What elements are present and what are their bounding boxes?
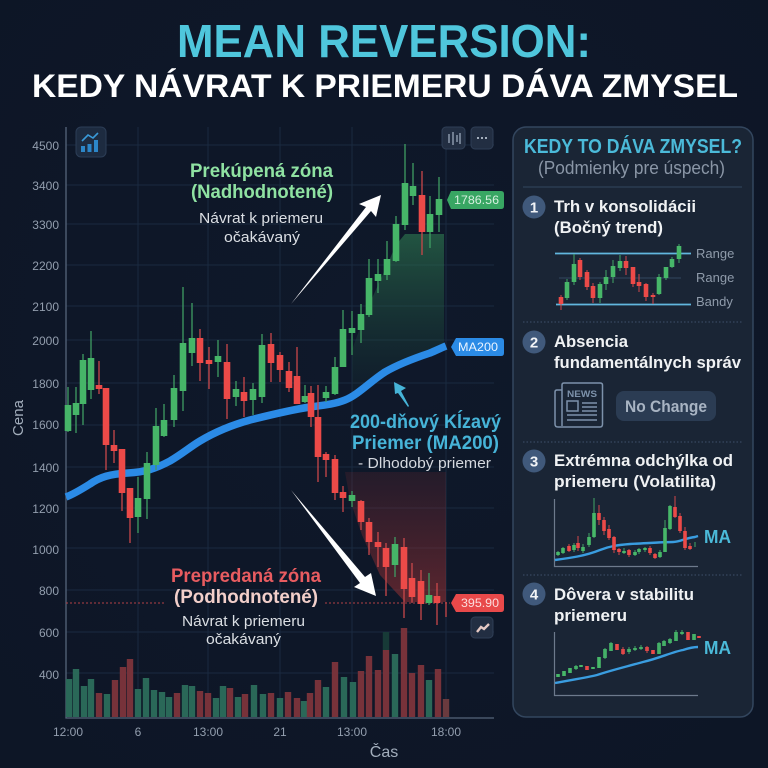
mini chart labels	[696, 246, 734, 309]
x axis labels: 13:00	[193, 725, 223, 739]
x axis labels: 13:00	[337, 725, 367, 739]
overbought label: (Nadhodnotené)	[191, 181, 333, 203]
x axis labels: 18:00	[431, 725, 461, 739]
mini chart labels: Bandy	[696, 294, 733, 309]
item 4: Dôvera v stabilitu	[554, 585, 694, 604]
y axis labels: 4500	[32, 139, 59, 153]
title: KEDY NÁVRAT K PRIEMERU DÁVA ZMYSEL	[32, 68, 738, 104]
x axis labels: 21	[273, 725, 287, 739]
y axis labels: 1600	[32, 418, 59, 432]
overbought label: Návrat k priemeru	[199, 210, 323, 227]
oversold label: Návrat k priemeru	[182, 613, 305, 630]
mini chart labels: Range	[696, 270, 734, 285]
mini chart labels: Range	[696, 246, 734, 261]
mini chart: range	[555, 244, 691, 310]
MA200 label	[350, 409, 501, 472]
oversold label: očakávaný	[206, 631, 282, 648]
volume bars	[69, 628, 446, 717]
panel subheading: (Podmienky pre úspech)	[538, 158, 725, 178]
y axis labels: 1800	[32, 377, 59, 391]
y axis labels: 3400	[32, 179, 59, 193]
item 3: Extrémna odchýlka od	[554, 451, 733, 470]
price tag green: 1786.56	[454, 193, 499, 207]
MA200 label: 200-dňový Kĺzavý	[350, 409, 501, 433]
overbought label	[190, 160, 333, 246]
item 4: priemeru	[554, 606, 627, 625]
y axis labels: 400	[39, 668, 59, 682]
price tag MA200: MA200	[458, 340, 498, 354]
price tag green	[447, 191, 504, 209]
y axis labels: 1400	[32, 461, 59, 475]
price tag red: 395.90	[461, 596, 499, 610]
icon: candles button	[442, 127, 465, 149]
item 1	[522, 196, 734, 310]
MA200 label: Priemer (MA200)	[352, 432, 499, 454]
oversold label	[171, 565, 321, 648]
icon: chart logo	[76, 127, 106, 157]
title: MEAN REVERSION:	[177, 15, 591, 67]
price tag red	[451, 594, 504, 612]
item 4: 4	[530, 586, 539, 604]
item 2: 2	[530, 334, 538, 352]
item 4	[522, 582, 731, 696]
candlesticks	[68, 144, 446, 625]
oversold label: Prepredaná zóna	[171, 565, 321, 587]
icon: small chart button	[471, 617, 493, 638]
item 2: fundamentálnych správ	[554, 353, 742, 372]
panel heading: KEDY TO DÁVA ZMYSEL?	[524, 135, 742, 158]
y axis labels: 600	[39, 626, 59, 640]
pill: no change	[616, 391, 716, 421]
item 1: Trh v konsolidácii	[554, 197, 696, 216]
x axis labels: 6	[135, 725, 142, 739]
y axis labels: 2200	[32, 259, 59, 273]
oversold level line	[66, 602, 450, 604]
x axis labels: 12:00	[53, 725, 83, 739]
y axis labels: 3300	[32, 218, 59, 232]
overbought label: očakávaný	[224, 229, 301, 246]
y axis labels: 2100	[32, 300, 59, 314]
title	[32, 15, 738, 104]
icon: newspaper: NEWS	[567, 389, 597, 400]
y axis labels: 1000	[32, 543, 59, 557]
x axis title: Čas	[370, 742, 398, 761]
item 1: 1	[530, 200, 538, 216]
item 1: (Bočný trend)	[554, 218, 663, 237]
price tag MA200	[451, 338, 504, 356]
mini chart: stable average	[554, 630, 699, 696]
panel: conditions	[513, 127, 753, 717]
y axis labels: 1200	[32, 502, 59, 516]
item 2: Absencia	[554, 332, 629, 351]
MA200 label: - Dlhodobý priemer	[358, 455, 491, 472]
y axis title: Cena	[10, 399, 27, 436]
arrow: down to oversold	[291, 490, 376, 596]
MA200 line	[66, 346, 446, 497]
mini chart label: MA	[704, 527, 731, 547]
y axis labels	[32, 139, 59, 682]
x axis labels	[53, 725, 461, 739]
icon: more button	[471, 127, 493, 149]
arrow: pointer to MA200	[394, 382, 409, 407]
item 3: priemeru (Volatilita)	[554, 472, 716, 491]
overbought label: Prekúpená zóna	[190, 160, 333, 182]
y axis labels: 2000	[32, 334, 59, 348]
pill: no change: No Change	[625, 397, 707, 416]
oversold label: (Podhodnotené)	[174, 586, 318, 608]
item 2	[522, 330, 742, 427]
item 3: 3	[530, 454, 538, 470]
mini chart label: MA	[704, 638, 731, 658]
overbought shaded zone	[352, 234, 444, 396]
icon: newspaper	[555, 383, 602, 427]
chart panel	[10, 127, 504, 761]
mini chart: volatility	[554, 496, 698, 566]
y axis labels: 800	[39, 584, 59, 598]
item 3	[522, 450, 733, 566]
oversold shaded zone	[345, 472, 446, 602]
arrow: up to overbought	[291, 195, 381, 304]
